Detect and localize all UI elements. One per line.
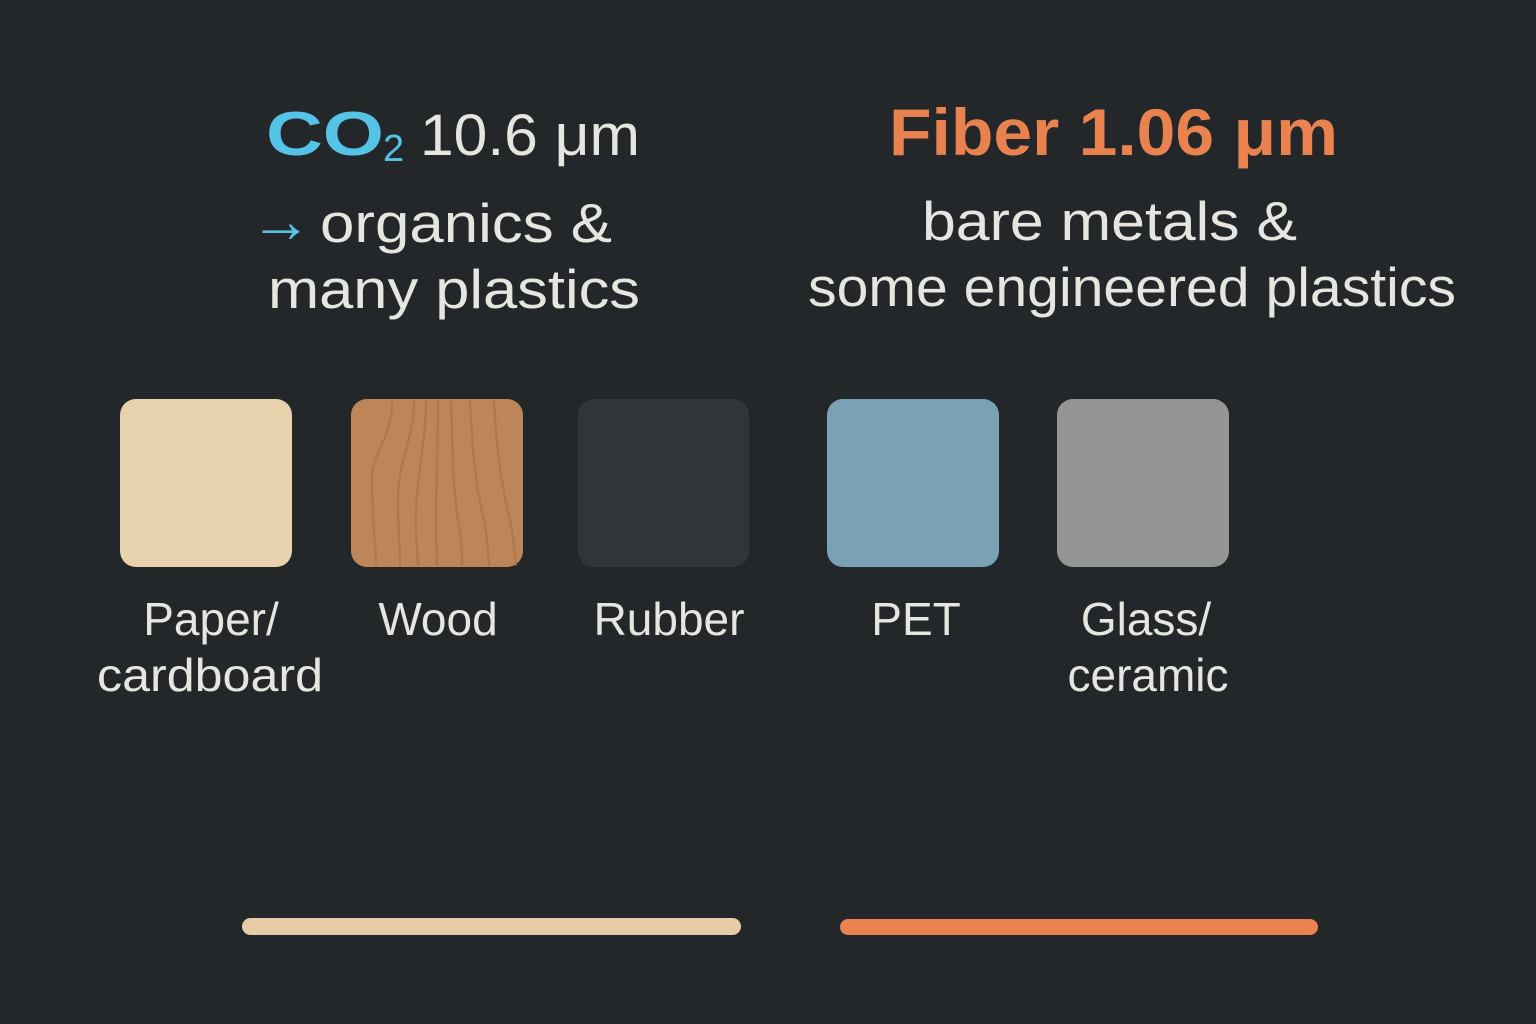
label: paper/cardboard: Paper/	[143, 593, 279, 645]
heading: CO2 laser: 10.6 μm	[420, 103, 640, 168]
label: PET: PET	[871, 593, 961, 645]
swatch: paper/cardboard	[120, 399, 292, 567]
label: paper/cardboard: cardboard	[97, 649, 323, 701]
swatch: rubber	[578, 399, 749, 567]
label: rubber: Rubber	[594, 593, 744, 645]
text: CO2 applications: organics &	[320, 192, 612, 254]
label: glass/ceramic: ceramic	[1067, 649, 1229, 701]
swatch: PET	[827, 399, 999, 567]
heading: CO2 laser	[266, 100, 640, 170]
swatch: glass/ceramic	[1057, 399, 1229, 567]
label: glass/ceramic: Glass/	[1081, 593, 1211, 645]
text: CO2 applications: →	[250, 187, 312, 256]
text: Fiber applications: bare metals &	[922, 190, 1297, 252]
label: wood: Wood	[378, 593, 498, 645]
label: paper/cardboard	[97, 593, 323, 701]
bar: fiber	[840, 919, 1318, 935]
heading: CO2 laser: CO	[266, 100, 384, 169]
text: Fiber applications	[808, 190, 1456, 318]
text: Fiber applications: some engineered plastics	[808, 256, 1456, 318]
text: CO2 applications: many plastics	[268, 258, 640, 320]
text: CO2 applications	[250, 187, 640, 320]
heading: Fiber laser: Fiber 1.06 μm	[889, 95, 1338, 169]
label: glass/ceramic	[1067, 593, 1229, 701]
heading: CO2 laser: 2	[383, 128, 404, 170]
swatch: wood	[351, 399, 523, 567]
bar: CO2	[242, 918, 741, 935]
